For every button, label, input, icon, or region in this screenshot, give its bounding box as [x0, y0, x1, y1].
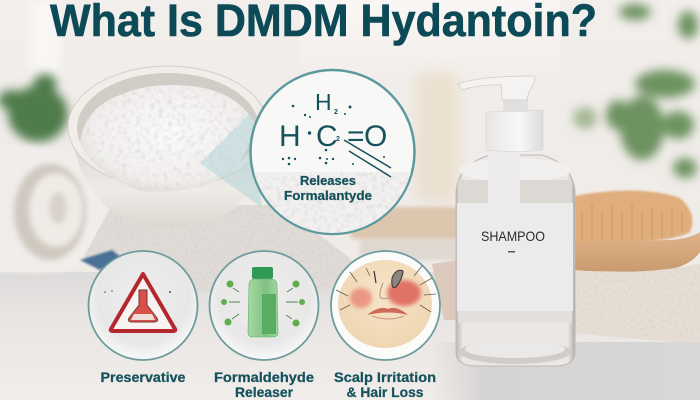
feature circle: preservative — [88, 251, 198, 360]
pump head and nozzle — [458, 76, 535, 100]
label: scalp irritation and hair loss — [334, 369, 436, 400]
label: scalp irritation and hair loss: & Hair Loss — [346, 384, 424, 400]
label: formaldehyde releaser: Formaldehyde — [214, 369, 314, 385]
label text: SHAMPOO — [481, 228, 545, 244]
label — [457, 203, 573, 311]
plant: right blurred leaves — [573, 4, 698, 178]
pump bottle — [456, 76, 575, 366]
plant: left blurred leaves — [0, 74, 68, 142]
icon: green bottle with spores — [221, 267, 305, 337]
pump tube — [488, 150, 520, 204]
formula: H C2 = O: C — [316, 120, 338, 153]
bowl of white powder — [68, 66, 268, 227]
magnifier wedge — [200, 111, 262, 208]
folded towel right — [432, 260, 700, 343]
feature circle: scalp irritation — [331, 251, 440, 360]
pump collar — [486, 110, 543, 152]
blue cloth edge — [80, 250, 122, 270]
feature circle: formaldehyde releaser — [210, 251, 318, 360]
powder mound — [80, 85, 254, 191]
label: formaldehyde releaser: Releaser — [235, 384, 294, 400]
pump stem — [503, 98, 528, 112]
wooden tray behind bottle — [350, 207, 465, 260]
double bond lines — [344, 140, 391, 177]
brush wooden base — [575, 232, 700, 272]
icon: warning triangle with flask — [104, 274, 175, 331]
label: scalp irritation and hair loss: Scalp Irritation — [334, 369, 436, 385]
formula: H2: H — [315, 89, 332, 115]
hair brush — [574, 190, 700, 272]
rolled towel — [0, 146, 104, 273]
formula: H C2 = O: = — [347, 120, 365, 153]
powder texture at circle base — [250, 172, 415, 235]
formula: H C2 = O: H — [279, 120, 301, 153]
glass body — [456, 155, 575, 366]
cream jar: blurred background object — [415, 72, 459, 202]
label: formaldehyde releaser — [214, 369, 314, 400]
electron dots — [282, 105, 385, 165]
magnified formula circle — [250, 70, 415, 235]
formula: H C2 = O: 2 — [336, 136, 340, 143]
icon: irritated face — [336, 260, 436, 348]
magnified formula circle: Formalantyde — [284, 189, 372, 203]
formula: H C2 = O: O — [364, 120, 387, 153]
circle caption: Releases — [300, 174, 356, 188]
label: preservative: Preservative — [100, 369, 186, 385]
magnified formula circle: 2 — [334, 109, 338, 116]
bottle base — [459, 340, 571, 364]
formula: H C2 = O — [279, 120, 387, 153]
folded cloth under bowl — [84, 205, 355, 292]
